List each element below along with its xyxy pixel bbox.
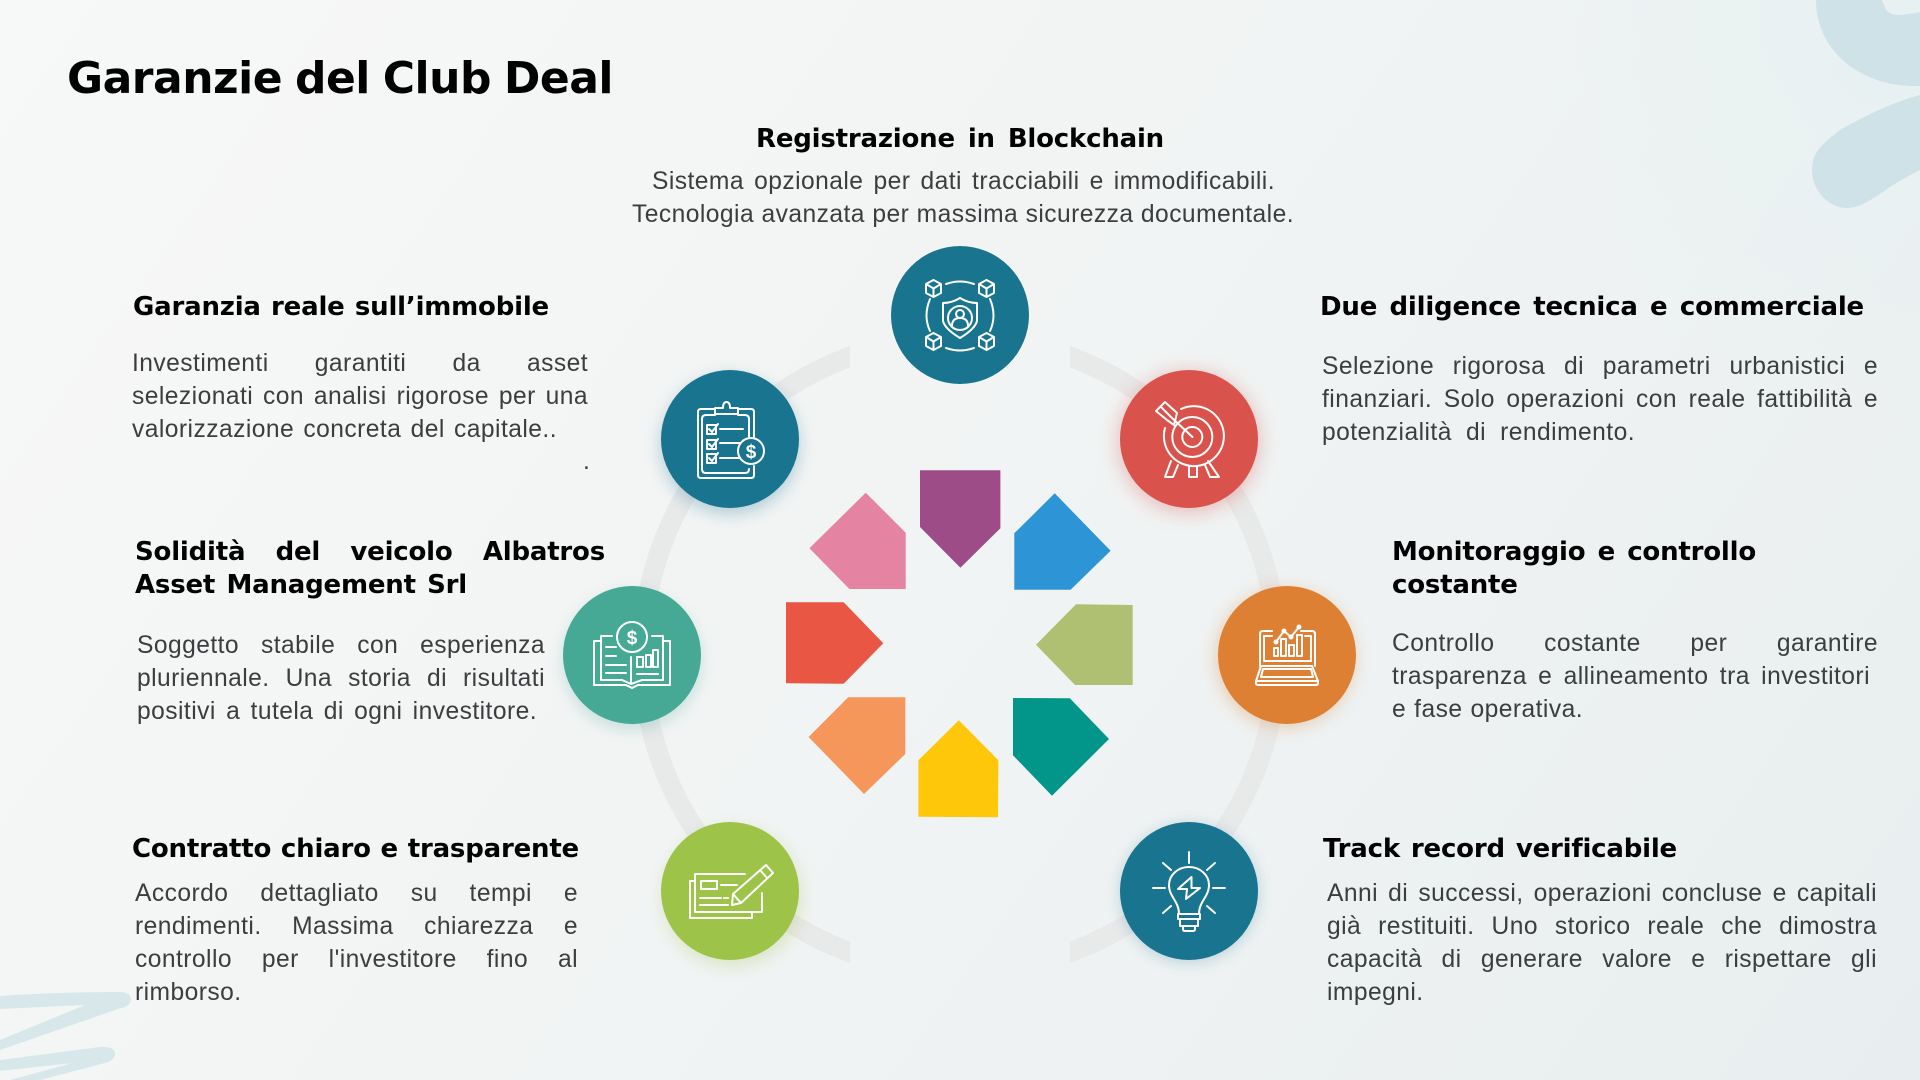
icon: cheque and pencil [661,822,799,960]
heading: costante [1392,570,1518,600]
icon: open book with coin: $ [627,628,638,649]
body [632,168,1294,228]
body: capacità di generare valore e rispettare gli [1327,946,1877,973]
body: pluriennale. Una storia di risultati [137,665,545,692]
text block: Registrazione in Blockchain [632,124,1294,228]
heading: Asset Management Srl [135,570,467,600]
body: rimborso. [135,979,242,1006]
body: Anni di successi, operazioni concluse e capitali [1327,880,1877,907]
body: e fase operativa. [1392,696,1583,723]
heading: Due diligence tecnica e commerciale [1320,292,1864,322]
body: Controllo costante per garantire [1392,630,1878,657]
body [1392,630,1878,723]
body [132,350,590,475]
ring arcs [640,346,1280,962]
body: Soggetto stabile con esperienza [137,632,545,659]
text block: Solidità del veicolo [135,537,605,725]
body: rendimenti. Massima chiarezza e [135,913,578,940]
text block: Due diligence [1320,292,1878,446]
body [137,632,545,725]
heading: Track record verificabile [1323,834,1677,864]
text block: Monitoraggio [1392,537,1878,723]
body: trasparenza e allineamento tra investitori [1392,663,1870,690]
body: Investimenti garantiti da asset [132,350,588,377]
body: positivi a tutela di ogni investitore. [137,698,537,725]
icon: blockchain shield [891,246,1029,384]
text block: Garanzia reale [132,292,590,475]
icon: light bulb [1120,822,1258,960]
icon: target with arrow [1120,370,1258,508]
heading: Monitoraggio e controllo [1392,537,1756,567]
body: Selezione rigorosa di parametri urbanistici e [1322,353,1878,380]
heading [1392,537,1756,600]
heading: Solidità del veicolo Albatros [135,537,605,567]
body: potenzialità di rendimento. [1322,419,1635,446]
body: . [583,448,590,475]
title: Garanzie del Club Deal [67,53,613,104]
body: selezionati con analisi rigorose per una [132,383,588,410]
icon: clipboard checklist with coin [661,370,799,508]
body: già restituiti. Uno storico reale che dimostra [1327,913,1877,940]
heading: Garanzia reale sull’immobile [133,292,549,322]
icon: laptop with chart [1218,586,1356,724]
heading [135,537,605,600]
body: Accordo dettagliato su tempi e [135,880,578,907]
body: Tecnologia avanzata per massima sicurezza documentale. [632,201,1294,228]
heading: Contratto chiaro e trasparente [132,834,579,864]
body: finanziari. Solo operazioni con reale fattibilità e [1322,386,1878,413]
heading: Registrazione in Blockchain [756,124,1164,154]
body [1322,353,1878,446]
body: valorizzazione concreta del capitale.. [132,416,557,443]
text block: Track record [1323,834,1877,1006]
body: controllo per l'investitore fino al [135,946,578,973]
icon: open book with coin [563,586,701,724]
text block: Contratto chiaro [132,834,579,1006]
body [135,880,578,1006]
body: Sistema opzionale per dati tracciabili e immodificabili. [652,168,1275,195]
body: impegni. [1327,979,1424,1006]
icon: clipboard checklist with coin: $ [746,442,757,463]
body [1327,880,1877,1006]
